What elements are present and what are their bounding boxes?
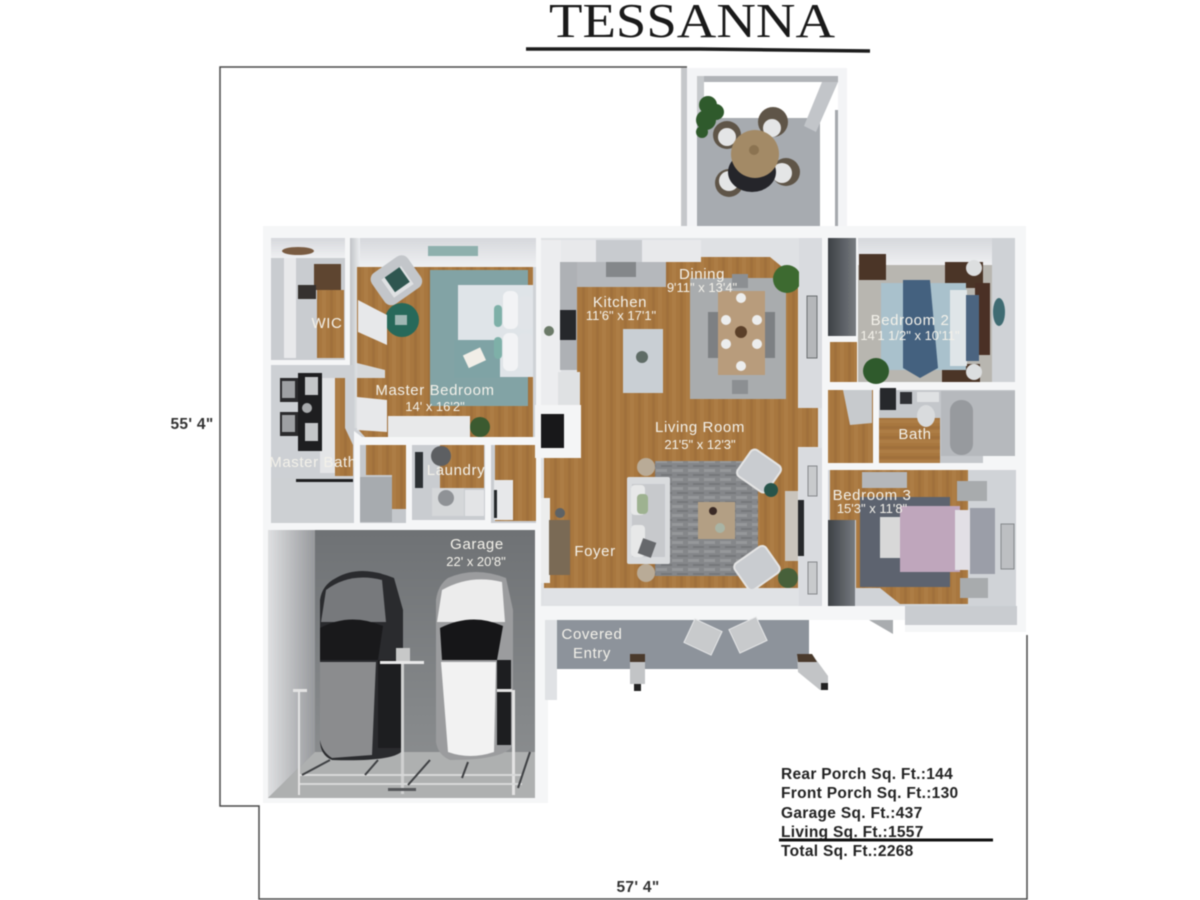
panel: lanai <box>681 68 847 226</box>
icon: right post <box>797 654 828 690</box>
label: Foyer <box>574 543 616 560</box>
panel: bath <box>879 388 1015 465</box>
panel: bedroom 2 <box>828 238 1015 384</box>
nightstands <box>957 481 988 598</box>
label: 14' x 16'2" <box>405 399 465 414</box>
icon: toilet <box>917 392 939 427</box>
panel: bedroom 3 <box>828 470 1017 625</box>
panel: great room <box>535 238 822 606</box>
window <box>428 246 478 256</box>
label: Covered <box>562 626 622 643</box>
label: WIC <box>312 315 342 332</box>
front bay <box>544 589 799 604</box>
icon: mirror <box>993 298 1005 326</box>
label: 15'3" x 11'8" <box>837 501 908 516</box>
label: 9'11" x 13'4" <box>667 280 738 295</box>
garage storage rails <box>293 648 530 795</box>
dimension: depth: 55' 4" <box>170 416 214 433</box>
panel: hall closet <box>828 390 873 463</box>
kitchen counters <box>541 240 701 408</box>
icon: white car <box>436 572 513 760</box>
icon: plant <box>863 358 889 384</box>
label: 11'6" x 17'1" <box>586 308 657 323</box>
label: Bedroom 3 <box>833 487 911 504</box>
TV console <box>785 491 798 561</box>
label: Garage <box>450 536 504 553</box>
icon: armchairs <box>732 448 798 592</box>
icon: porch chairs <box>684 617 767 655</box>
dining table <box>708 274 775 394</box>
stat: front porch: Front Porch Sq. Ft.:130 <box>781 785 958 802</box>
label: 14'1 1/2" x 10'11" <box>860 328 960 343</box>
wall art <box>1001 524 1014 569</box>
kitchen island <box>623 329 663 393</box>
dimension: width: 57' 4" <box>616 879 660 896</box>
vanity <box>280 373 322 451</box>
nightstands <box>859 254 983 382</box>
stat: rear porch: Rear Porch Sq. Ft.:144 <box>781 766 953 783</box>
panel: utility closet <box>360 445 406 523</box>
icon: armchair <box>367 252 425 308</box>
icon: lanai table <box>728 130 779 192</box>
sum line <box>779 838 993 842</box>
panel: house shell <box>263 226 1026 803</box>
icon: sofa <box>627 477 670 564</box>
panel: side closet <box>491 445 536 523</box>
label: Dining <box>679 266 725 283</box>
stat: total: Total Sq. Ft.:2268 <box>781 843 914 860</box>
dresser <box>388 416 470 437</box>
closet doors <box>358 300 387 345</box>
panel: walk-in closet <box>271 238 345 360</box>
label: Master Bedroom <box>375 382 495 399</box>
label: Entry <box>573 645 611 662</box>
icon: plant <box>470 417 490 437</box>
bed <box>454 285 533 378</box>
stat: living: Living Sq. Ft.:1557 <box>781 824 924 841</box>
dining rug <box>690 278 786 399</box>
icon: lanai chairs <box>713 107 800 197</box>
label: 21'5" x 12'3" <box>664 437 736 452</box>
living rug <box>655 461 758 576</box>
washer <box>432 488 464 516</box>
bed <box>900 506 995 574</box>
label: 22' x 20'8" <box>446 554 506 569</box>
label: Laundry <box>427 462 485 479</box>
label: Master Bath <box>269 454 357 471</box>
label: Living Room <box>655 419 745 436</box>
panel: covered entry <box>545 617 828 700</box>
icon: dark car <box>320 571 403 760</box>
bench <box>880 517 900 558</box>
panel: laundry <box>412 445 485 520</box>
dryer <box>465 490 484 516</box>
lot outline dimension lines <box>220 67 1027 899</box>
panel: master bedroom <box>350 238 536 437</box>
wall stub with fireplace <box>535 405 581 458</box>
icon: plant <box>773 265 801 293</box>
square footage table <box>779 766 993 860</box>
panel: garage <box>268 530 535 798</box>
icon: left post <box>630 654 645 691</box>
foyer console <box>541 498 570 583</box>
bed <box>881 280 990 378</box>
label: Bath <box>898 426 932 443</box>
bottom band <box>905 606 1017 625</box>
label: Kitchen <box>593 294 647 311</box>
tub <box>941 391 1015 465</box>
bay wedge <box>869 620 893 634</box>
right wall <box>799 238 822 408</box>
title underline <box>526 49 870 51</box>
label: Bedroom 2 <box>871 312 949 329</box>
panel: master bath <box>269 365 357 523</box>
icon: coffee table <box>698 502 735 539</box>
icon: round table <box>385 303 419 337</box>
icon: side tables <box>637 458 655 582</box>
icon: plant <box>696 96 724 138</box>
rug <box>430 270 528 406</box>
stat: garage: Garage Sq. Ft.:437 <box>781 805 923 822</box>
